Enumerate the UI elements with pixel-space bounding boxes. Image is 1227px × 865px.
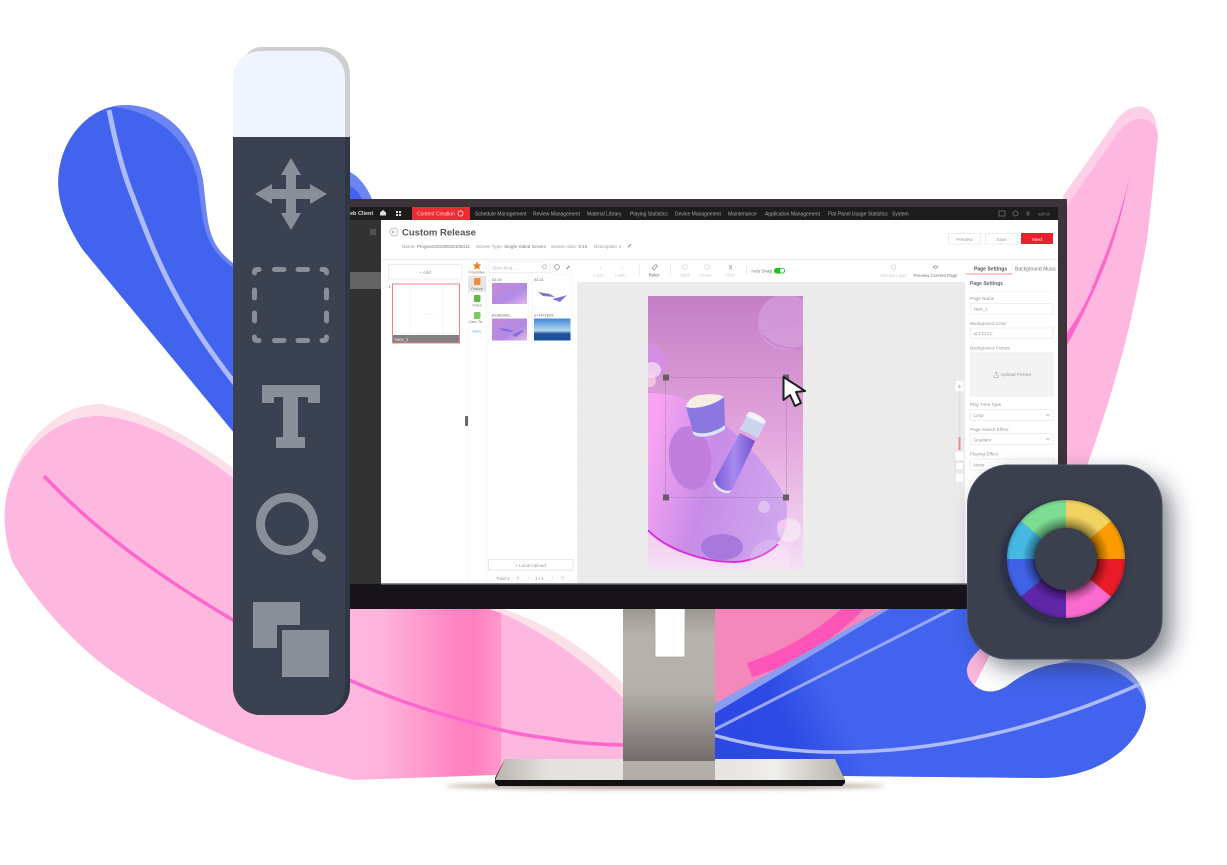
editor toolbar: ↑ (598, 266, 602, 272)
library tabs: More (472, 328, 482, 334)
screen (350, 207, 1058, 584)
blue leaf: lower right (700, 605, 1146, 778)
pink leaf: large lower left (5, 404, 630, 780)
editor toolbar: ↓ (620, 266, 624, 272)
navigation bar: System (892, 212, 909, 218)
page settings panel: Upload Picture (1001, 372, 1032, 377)
page settings panel: Page Switch Effect (970, 427, 1009, 432)
editor toolbar: Forwa... (699, 272, 715, 278)
blob magenta edge (648, 530, 778, 562)
library tabs (468, 260, 487, 584)
header buttons: Next (1032, 237, 1043, 243)
page list panel: New_1 (394, 337, 409, 342)
page settings panel: Background Music (1015, 266, 1057, 272)
icon: refresh (458, 211, 463, 216)
page header: Screen Size: 9:16 (551, 244, 588, 249)
glass sphere top right (758, 296, 803, 350)
material library panel: Searching... (492, 265, 516, 270)
media card 2 (532, 274, 572, 307)
editor toolbar: Window Layer (880, 273, 907, 278)
navigation bar: Material Library (587, 212, 622, 218)
page header: Screen Type: Single-Sided Screen (476, 244, 547, 249)
material library panel: 02-01 (492, 278, 502, 282)
navigation bar: Application Management (765, 212, 821, 218)
neck front foot (623, 761, 715, 780)
base shadow (445, 783, 885, 789)
page settings panel: None (974, 462, 985, 468)
icon: dashed selection (254, 270, 326, 340)
icon: overlapping layers (253, 602, 329, 677)
page settings panel (965, 260, 1058, 584)
main white page (381, 220, 1058, 584)
page list panel: 1 (388, 284, 392, 289)
toolbar body (233, 137, 350, 715)
page settings panel: New_1 (974, 306, 988, 312)
side navigation (350, 220, 381, 584)
toolbar top cap shadow (240, 47, 350, 137)
wheel hub (1035, 528, 1097, 590)
media card 4 (532, 310, 572, 343)
navigation bar: Flat Panel Usage Statistics (828, 212, 888, 218)
page settings panel: Play Time Type (970, 402, 1002, 407)
blob inner oval (668, 426, 711, 490)
library tabs: Favorites (469, 270, 485, 274)
page settings panel: Loop (974, 413, 984, 418)
material library panel: 02-01 (534, 278, 544, 282)
icon: magnifier (260, 498, 322, 558)
blob lower oval (701, 534, 743, 560)
page settings panel: Playing Effect (970, 452, 999, 456)
colour ring (1007, 500, 1125, 618)
icon: move arrows (255, 158, 327, 230)
page settings panel: #FFFFFF (974, 331, 993, 336)
page header: Description ∨ (594, 244, 622, 249)
editor toolbar: Clear (725, 272, 736, 278)
material library panel: › (552, 575, 554, 580)
page list panel: + Add (419, 270, 431, 275)
editor toolbar: Ruler (649, 272, 660, 278)
chin (350, 584, 1067, 609)
base plate (495, 759, 845, 786)
material library panel: shutterstoc... (492, 314, 513, 318)
toolbar top cap (233, 51, 345, 137)
material library panel: |‹ (517, 575, 520, 580)
icon: home (380, 210, 386, 216)
bezel (350, 199, 1067, 609)
material library panel: 1 / 1 (535, 576, 544, 581)
media card 3 (489, 310, 528, 343)
page header (381, 228, 1058, 260)
page settings panel: Page Settings (970, 281, 1003, 287)
page header: Name: Program20230818105411 (402, 244, 470, 249)
library tabs: Video (472, 304, 482, 308)
navigation bar: Content Creation (417, 212, 455, 218)
serum bottle (713, 412, 766, 493)
library tabs: User Te... (469, 320, 485, 324)
zoom slider: + (957, 382, 962, 391)
header buttons: Preview (956, 237, 973, 242)
navigation bar: eb Client (350, 211, 373, 217)
ring shading (1007, 500, 1125, 618)
header buttons (948, 233, 1053, 244)
monitor stand (445, 605, 885, 789)
page list panel (388, 264, 468, 426)
page settings panel: Page Name (970, 296, 995, 301)
tile background (968, 465, 1162, 659)
cable notch (655, 605, 685, 657)
pagination: Total 2 (496, 576, 510, 581)
bubbles (648, 375, 801, 560)
page settings panel: Background Picture (970, 346, 1011, 350)
editor toolbar: Auto Snap (751, 268, 773, 274)
material library panel: ‹ (528, 575, 530, 580)
material library panel: + Local Upload (515, 563, 546, 568)
editor toolbar (593, 264, 958, 278)
colour wheel tile (968, 465, 1162, 659)
screen bottom edge (381, 583, 1058, 584)
page settings panel: Gradient (974, 438, 992, 442)
media card 1 (489, 274, 528, 307)
navigation bar (350, 207, 1058, 220)
navigation bar: Device Management (675, 212, 721, 218)
page header: Custom Release (402, 228, 476, 238)
material library panel (488, 262, 573, 581)
editor toolbar: Preview Current Page (913, 273, 958, 278)
editor toolbar: Layer... (615, 272, 629, 278)
active tab (412, 207, 470, 220)
toggle: auto snap (774, 268, 785, 274)
icon: favorites star (473, 262, 481, 270)
tools toolbar (233, 47, 350, 715)
icon: text tool (262, 385, 320, 448)
navigation bar: Schedule Management (475, 212, 527, 218)
navigation bar: admin (1038, 212, 1051, 216)
monitor (350, 199, 1067, 609)
selection box (663, 374, 789, 500)
material library panel: ›| (561, 575, 564, 580)
navigation bar: Playing Statistics (630, 212, 668, 218)
editing canvas (577, 282, 965, 584)
page settings panel: Background Color (970, 321, 1007, 326)
icon: grid (396, 211, 401, 216)
pink leaf: rear panel behind the monitor (700, 605, 895, 725)
navigation bar: Review Management (533, 212, 581, 218)
page thumbnail (392, 284, 460, 343)
glass sphere left (648, 343, 666, 378)
navigation bar: Maintenance (728, 212, 757, 218)
library tabs: Picture (471, 287, 483, 291)
neck (623, 605, 715, 761)
material library panel: u=1471824... (534, 314, 556, 318)
blue leaf: upper left (58, 105, 374, 440)
icon: mouse cursor (784, 377, 805, 406)
editor toolbar: Layer... (593, 272, 607, 278)
local upload button (488, 560, 573, 570)
nav icons (999, 211, 1029, 216)
large glass blob (648, 393, 787, 562)
editor toolbar: Back (680, 272, 691, 278)
page settings panel: Page Settings (974, 266, 1007, 272)
pink leaf: upper right with stem (900, 106, 1158, 690)
cream jar (686, 394, 725, 437)
zoom slider (956, 381, 964, 482)
header buttons: Save (996, 237, 1007, 242)
poster artwork (648, 296, 803, 569)
